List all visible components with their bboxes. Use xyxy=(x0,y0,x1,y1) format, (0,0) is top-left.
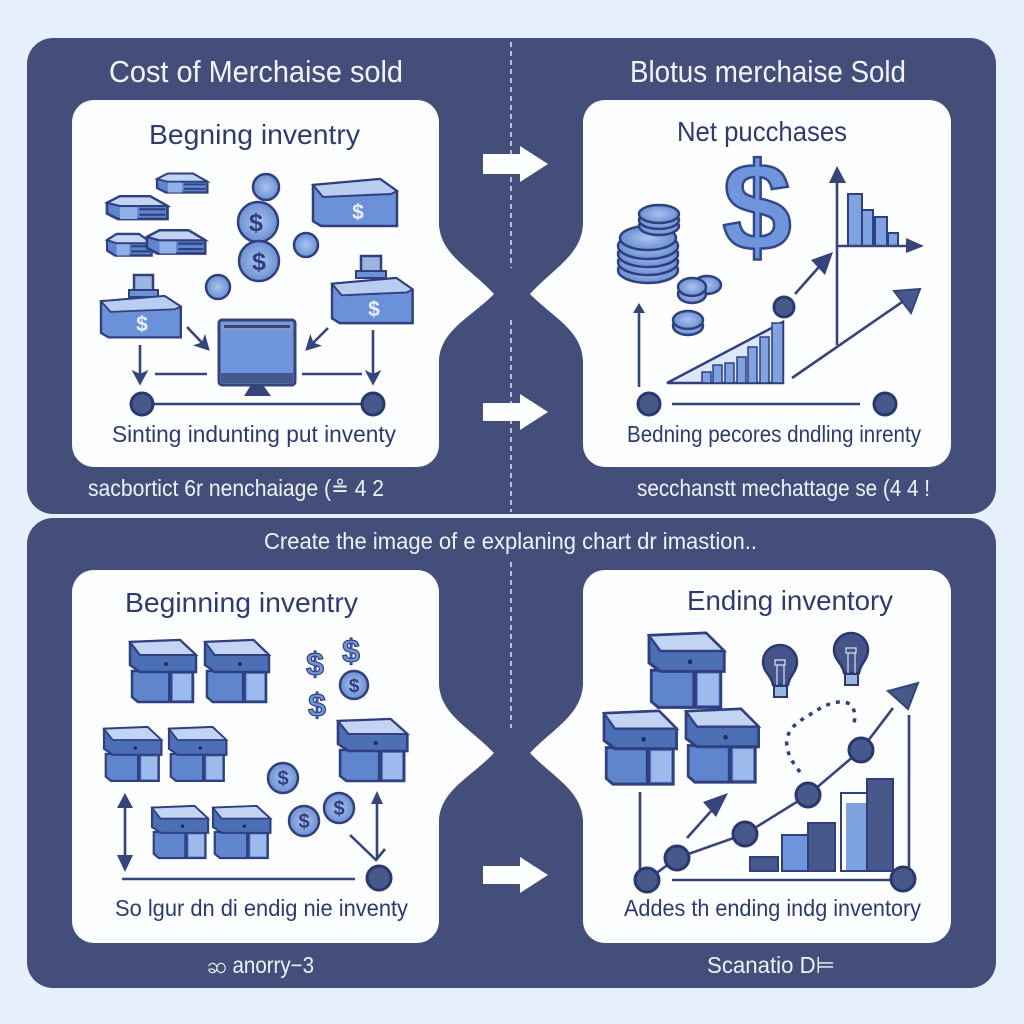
icon: large dollar: $ xyxy=(722,138,792,277)
heading: beginning inventory: Beginning inventry xyxy=(125,587,358,618)
panel: beginning inventory bottom xyxy=(72,570,494,943)
panel: net purchases xyxy=(530,100,951,467)
icons: dollar signs and coins: $ xyxy=(333,798,345,820)
heading: right title: Blotus merchaise Sold xyxy=(630,54,906,89)
heading: ending inventory: Ending inventory xyxy=(687,585,893,616)
icons: dollar signs and coins: $ xyxy=(306,646,324,682)
arrow: top xyxy=(483,146,548,182)
icons: dollar signs and coins: $ xyxy=(342,633,360,669)
icon: box right xyxy=(332,256,413,323)
icon: box top right xyxy=(313,179,397,226)
caption: Sinting indunting put inventy xyxy=(112,421,396,447)
footnote: top right: secchanstt mechattage se (4 4 ! xyxy=(637,475,930,501)
icons: storage boxes xyxy=(104,640,407,858)
flow arrows and timeline xyxy=(131,327,384,415)
icons: dollar signs and coins: $ xyxy=(298,811,310,833)
caption: Bedning pecores dndling inrenty xyxy=(627,421,921,447)
icons: dollar signs and coins xyxy=(268,633,368,836)
icons: dollar signs and coins: $ xyxy=(277,768,289,790)
heading: left title: Cost of Merchaise sold xyxy=(109,54,403,89)
icon: cash stacks xyxy=(107,174,207,256)
top dark band xyxy=(27,38,996,514)
heading: net purchases: Net pucchases xyxy=(677,116,847,147)
icon: coins: $ xyxy=(249,209,263,237)
vertical dashed dividers xyxy=(510,42,512,728)
icons: light bulbs xyxy=(763,633,868,697)
panel: beginning inventory top xyxy=(72,100,494,467)
line chart with arrow xyxy=(635,683,918,892)
chart: rising ramp bars xyxy=(667,322,783,383)
icon: monitor xyxy=(219,320,295,396)
footnote: bottom right: Scanatio D⊨ xyxy=(707,952,835,978)
icons: storage boxes xyxy=(604,633,759,784)
caption: So lgur dn di endig nie inventy xyxy=(115,895,408,921)
icon: box left xyxy=(101,275,181,337)
caption: Addes th ending indg inventory xyxy=(624,895,921,921)
arrows and timeline xyxy=(633,166,920,415)
arrow: bottom xyxy=(483,857,548,893)
icon: box left: $ xyxy=(136,313,148,336)
icon: box top right: $ xyxy=(352,201,364,224)
icons: dollar signs and coins: $ xyxy=(349,676,360,697)
icon: coin stacks xyxy=(618,205,721,335)
subtitle: centre: Create the image of e explaning chart dr imastion.. xyxy=(264,528,757,554)
footnote: top left: sacbortict 6r nenchaiage (≗ 4 2 xyxy=(88,475,384,501)
panel: ending inventory xyxy=(530,570,951,943)
chart: bars xyxy=(750,779,893,871)
icons: dollar signs and coins: $ xyxy=(308,687,326,723)
arrow: middle xyxy=(483,394,548,430)
heading: beginning inventory: Begning inventry xyxy=(149,119,360,150)
centre dashed line horizontal xyxy=(35,515,990,517)
icon: box right: $ xyxy=(368,298,380,321)
footnote: bottom left: ဆ anorry−3 xyxy=(207,952,314,978)
icon: coins: $ xyxy=(252,248,266,276)
chart: small falling bars xyxy=(838,194,924,253)
bottom dark band xyxy=(27,518,996,988)
arrows and timeline xyxy=(117,791,391,890)
icon: coins xyxy=(206,174,318,299)
